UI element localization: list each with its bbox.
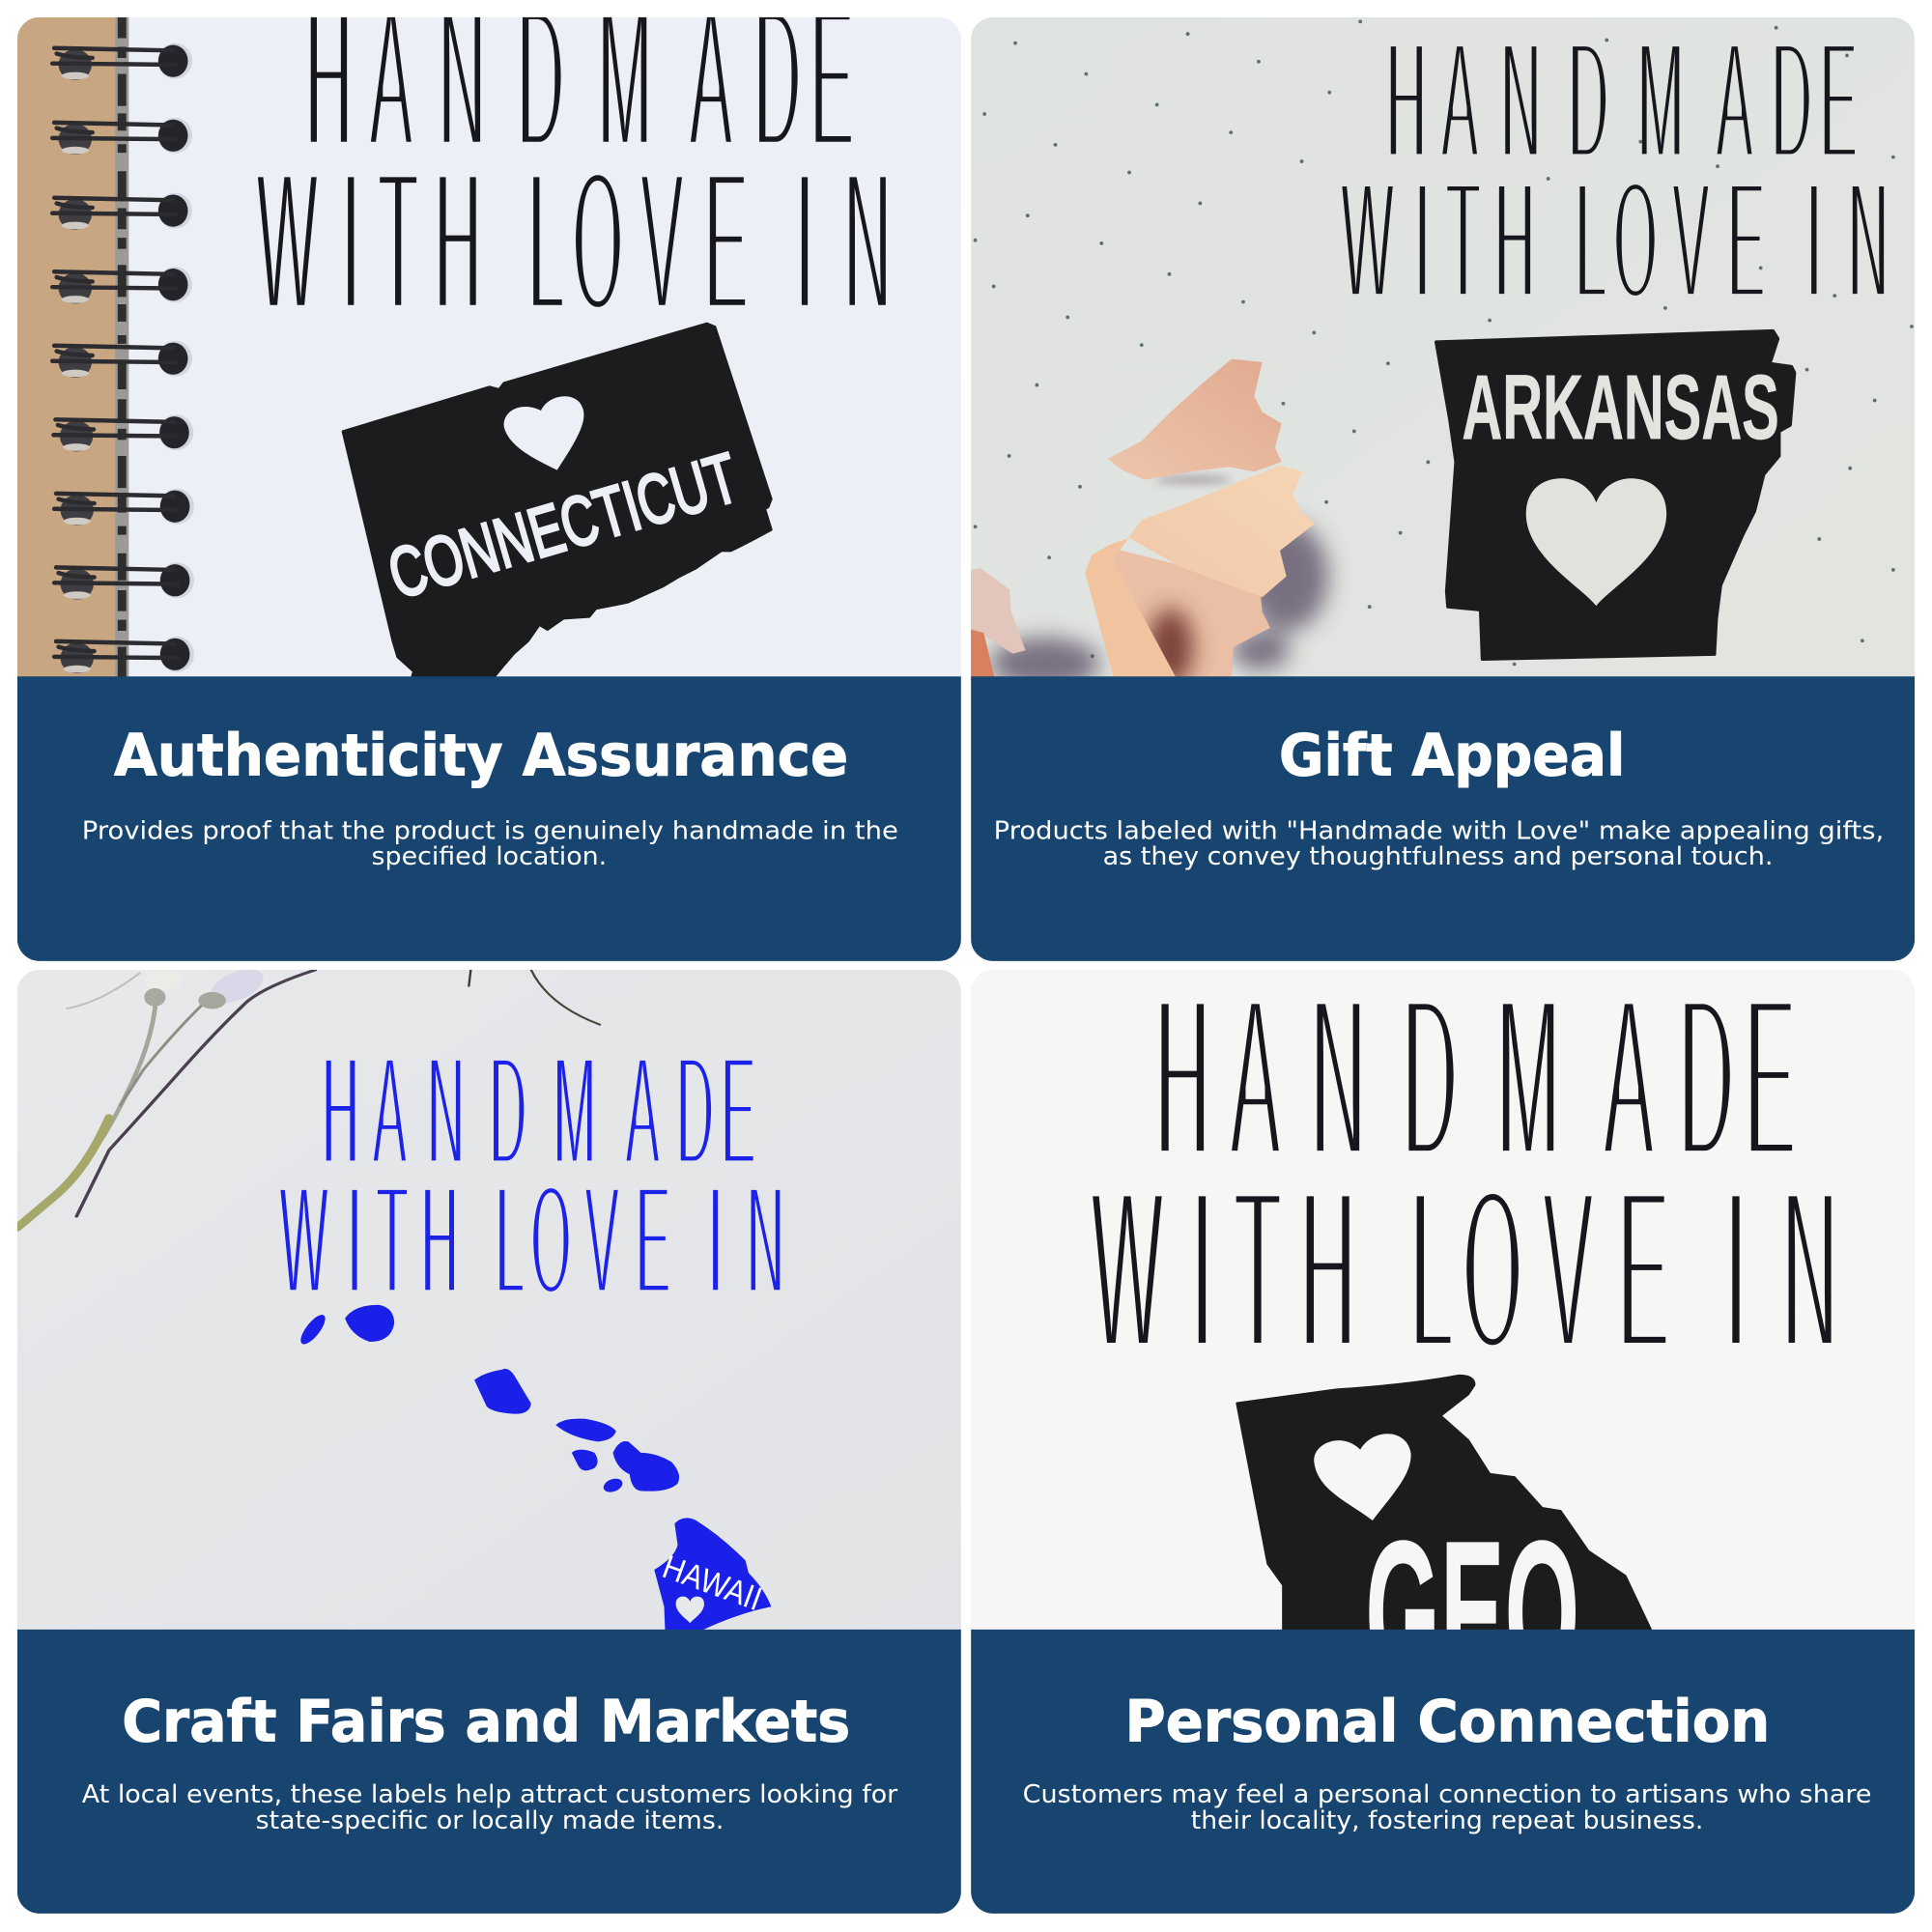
caption panel [971, 676, 1915, 966]
icon: hawaiian islands map [297, 1305, 771, 1637]
paper dots [974, 19, 1914, 666]
photo background: white paper [971, 970, 1915, 1635]
icon: heart [1526, 478, 1666, 606]
caption panel [17, 1630, 961, 1919]
caption panel [971, 1630, 1915, 1919]
icon: heart [1314, 1434, 1411, 1520]
stamp text: handmade: HANDMADE [1386, 5, 1857, 195]
panel: craft fairs and markets [17, 962, 961, 1919]
stamp text: with love in: WITH LOVE IN [1341, 145, 1889, 334]
large shaving lower pink part [1109, 548, 1270, 679]
icon: pencil shavings [971, 359, 1328, 689]
description: At local events, these labels help attract customers looking for [82, 1780, 898, 1809]
small shaving shadow [1154, 476, 1232, 484]
heading: Craft Fairs and Markets [122, 1688, 850, 1755]
description: Provides proof that the product is genuinely handmade in the [82, 817, 898, 846]
panel: personal connection: GEO [1365, 1498, 1579, 1728]
description: Products labeled with "Handmade with Love" make appealing gifts, [994, 817, 1884, 846]
inner dark shade [1148, 609, 1193, 686]
heading: Gift Appeal [1279, 722, 1625, 789]
left shaving chip [971, 568, 1026, 654]
panel: gift appeal [971, 5, 1915, 966]
icon: arkansas state shape [1436, 330, 1795, 659]
left pencil fragment [971, 630, 995, 679]
icon: connecticut map with heart and label [343, 324, 771, 683]
state label: CONNECTICUT [381, 439, 747, 613]
photo background: notebook paper [129, 17, 961, 676]
icon: plant stems and flowers [17, 962, 600, 1228]
stamp text: handmade: HANDMADE [1155, 949, 1795, 1206]
panel: authenticity assurance [17, 0, 961, 966]
photo background: grey paper [17, 970, 961, 1635]
description line 2: their locality, fostering repeat business. [1191, 1806, 1703, 1835]
heart [504, 396, 583, 470]
caption panel [17, 676, 961, 966]
large shaving upper light part [1128, 466, 1316, 597]
stamp text: handmade: HANDMADE [322, 1023, 755, 1198]
icon: georgia state shape [1237, 1376, 1653, 1634]
shavings shadows [990, 522, 1328, 689]
panel: personal connection [971, 949, 1915, 1919]
description: Customers may feel a personal connection to artisans who share [1023, 1780, 1872, 1809]
icon: heart [676, 1597, 704, 1623]
pencil wood wedge [1085, 538, 1177, 679]
state label: hawaii: HAWAII [658, 1548, 766, 1618]
stamp text: with love in: WITH LOVE IN [279, 1152, 784, 1327]
heading: Personal Connection [1125, 1688, 1770, 1755]
description line 2: state-specific or locally made items. [256, 1806, 724, 1835]
heading: Authenticity Assurance [114, 722, 848, 789]
state outline [343, 324, 771, 683]
icon: notebook spiral binding [52, 43, 194, 673]
top shaving [1108, 359, 1282, 480]
description line 2: specified location. [372, 842, 607, 871]
stamp text: with love in: WITH LOVE IN [1092, 1141, 1837, 1398]
description line 2: as they convey thoughtfulness and personal touch. [1103, 842, 1773, 871]
page edge stripe [115, 17, 128, 683]
kraft cover strip [17, 17, 116, 683]
stamp text: with love in: WITH LOVE IN [257, 129, 891, 353]
photo background: dotted paper [971, 17, 1915, 683]
